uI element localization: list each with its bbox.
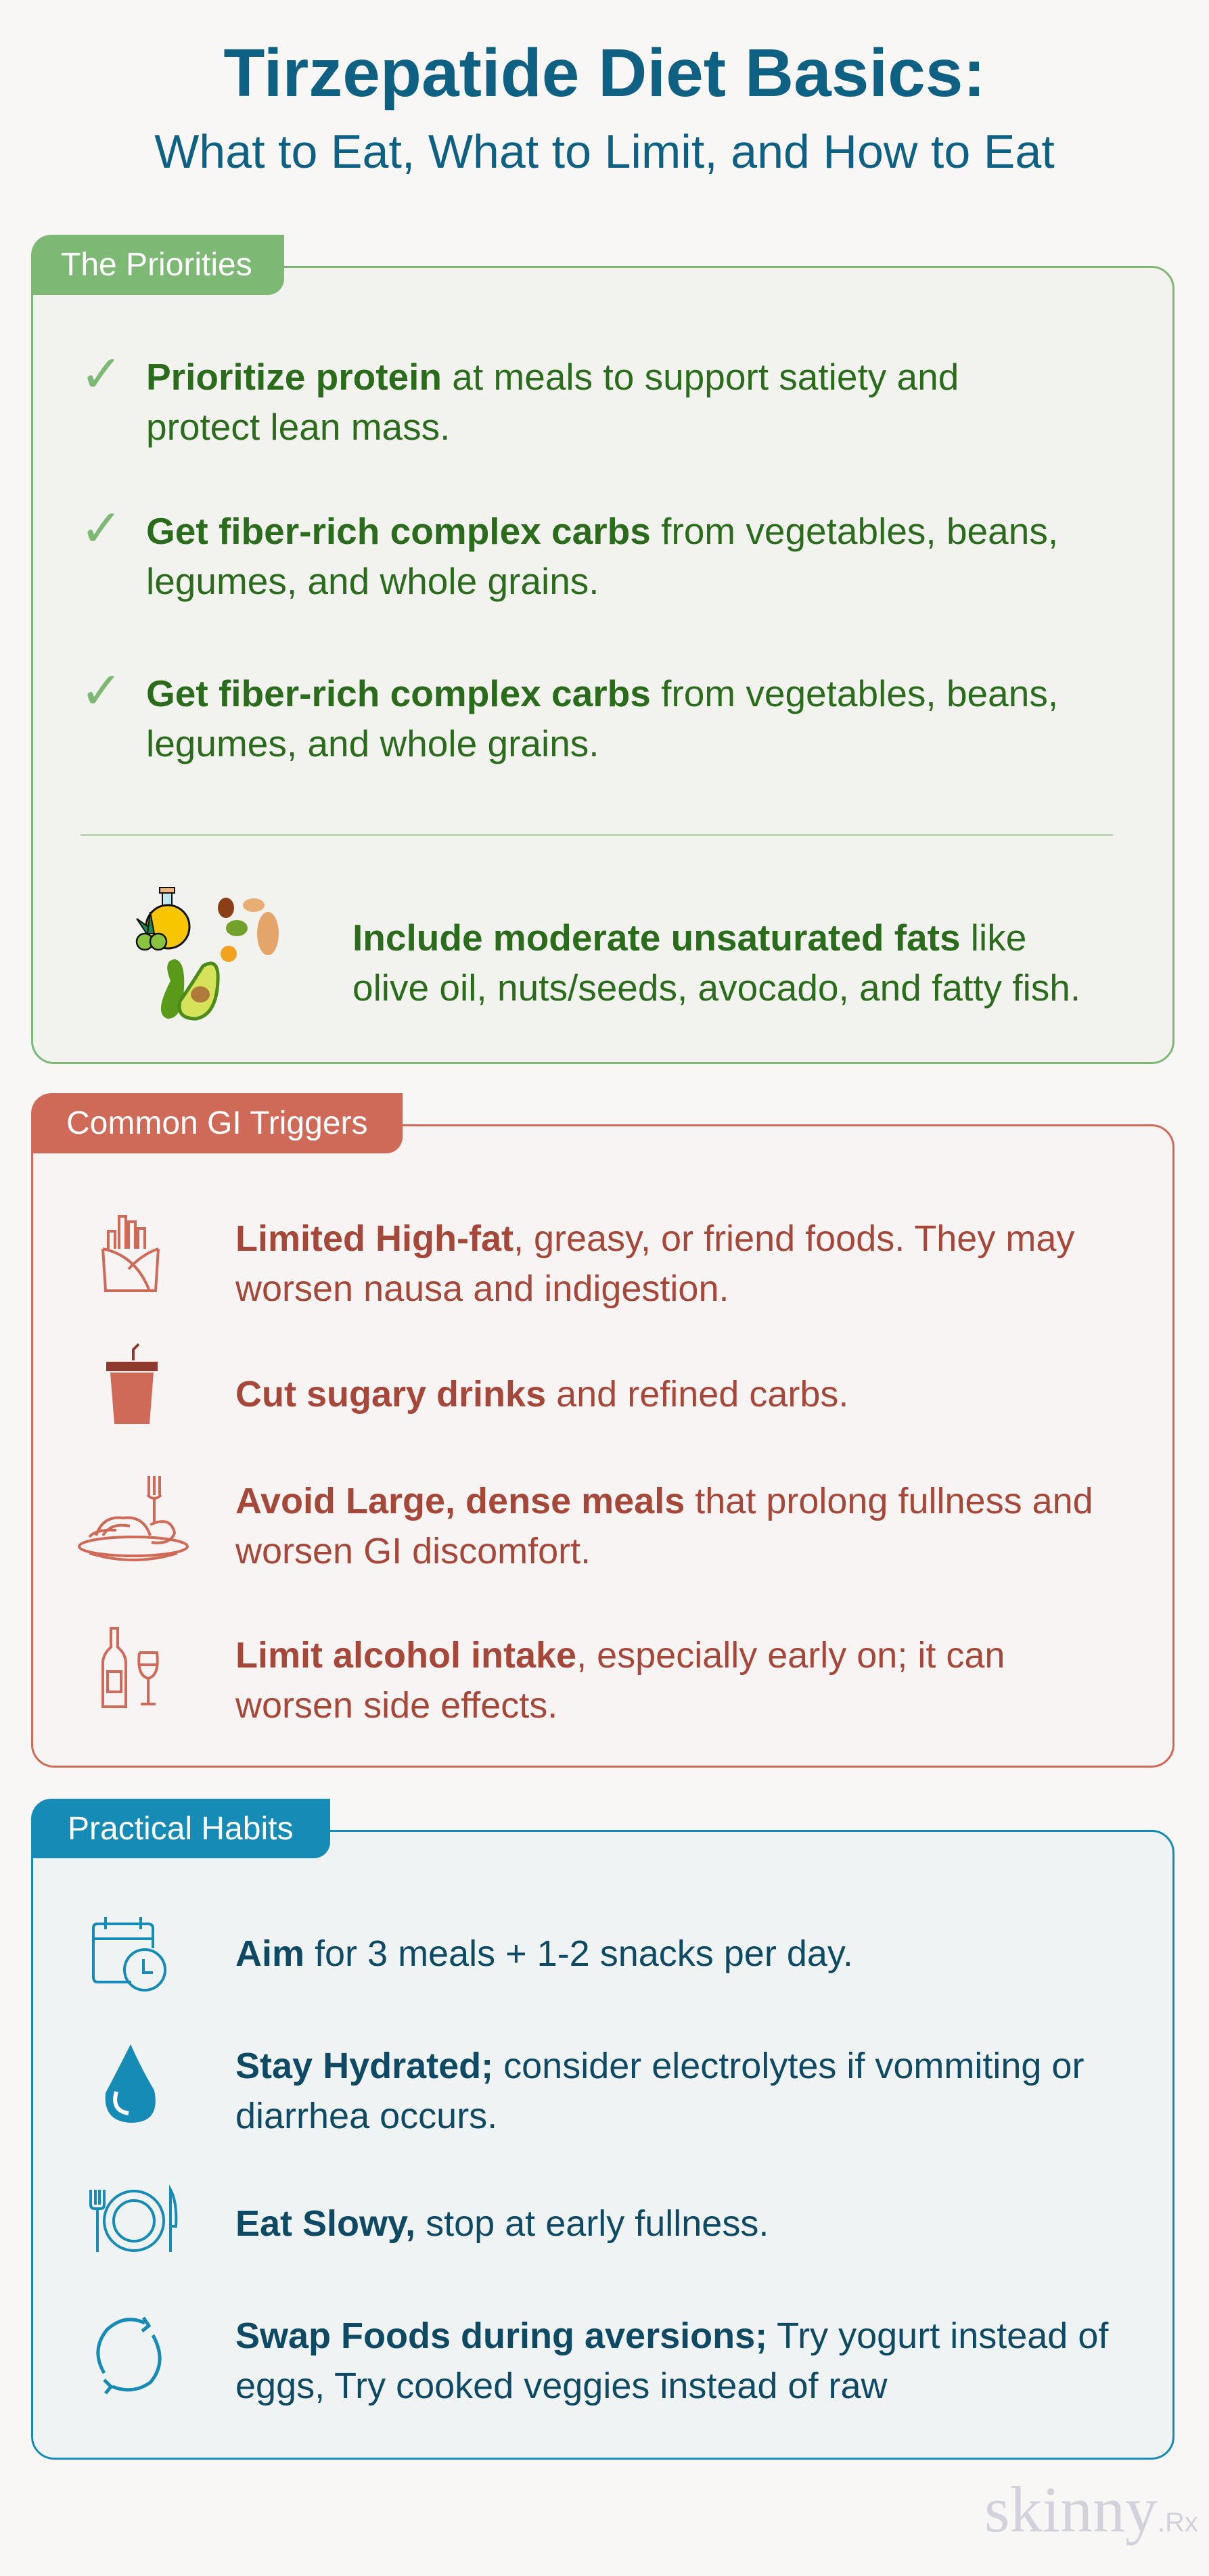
text: dense meals: Avoid Large, dense meals that prolong fullness and [235,1481,1093,1521]
text: dense meals: worsen GI discomfort. [235,1531,591,1571]
text: hydrated: Stay Hydrated; consider electrolytes if vommiting or [235,2046,1084,2086]
title: Tirzepatide Diet Basics: [223,35,986,111]
text: alcohol: worsen side effects. [235,1685,557,1726]
panel: common gi triggers [31,1124,1174,1768]
text: fiber carbs repeat [146,672,1058,764]
text: fiber carbs: Get fiber-rich complex carbs from vegetables, beans, [146,510,1058,552]
icon: check 1: ✓ [80,346,123,403]
text: fats: olive oil, nuts/seeds, avocado, and fatty fish. [352,967,1080,1009]
icon: healthy fats [135,887,279,1020]
text: sugary drinks: Cut sugary drinks and refined carbs. [235,1374,848,1414]
icon: sugary drink [106,1343,158,1424]
text: high-fat: worsen nausa and indigestion. [235,1268,729,1309]
tab: practical habits: Practical Habits [68,1810,293,1847]
text: high-fat [235,1218,1074,1309]
tab: the priorities: The Priorities [61,247,252,283]
text: hydrated: diarrhea occurs. [235,2096,497,2136]
text: dense meals [235,1481,1093,1571]
text: hydrated [235,2046,1084,2136]
logo: skinny rx: skinny.Rx [984,2473,1198,2546]
text: swap foods [235,2316,1108,2406]
subtitle: What to Eat, What to Limit, and How to Eat [154,125,1055,178]
text: fiber carbs repeat: Get fiber-rich complex carbs from vegetables, beans, [146,672,1058,714]
text: fats [352,917,1080,1009]
text: swap foods: Swap Foods during aversions; Try yogurt instead of [235,2316,1108,2356]
text: aim meals: Aim for 3 meals + 1-2 snacks per day. [235,1933,853,1974]
icon: fries [101,1215,160,1292]
text: protein: Prioritize protein at meals to support satiety and [146,356,959,398]
text: fiber carbs: legumes, and whole grains. [146,560,599,602]
icon: water drop [106,2044,156,2123]
icon: check 3: ✓ [80,662,123,720]
text: alcohol: Limit alcohol intake, especially early on; it can [235,1635,1005,1676]
icon: alcohol [101,1627,159,1708]
text: protein [146,356,959,448]
tab: common gi triggers: Common GI Triggers [66,1105,367,1141]
tab: practical habits [31,1799,330,1858]
icon: calendar clock [92,1917,166,1992]
icon: plate [89,2184,177,2252]
tab: the priorities [31,235,284,295]
text: fiber carbs [146,510,1058,602]
text: swap foods: eggs, Try cooked veggies instead of raw [235,2366,888,2406]
text: alcohol [235,1635,1005,1726]
text: protein: protect lean mass. [146,406,450,448]
panel: practical habits [31,1830,1174,2460]
text: fiber carbs repeat: legumes, and whole grains. [146,722,599,764]
text: high-fat: Limited High-fat, greasy, or friend foods. They may [235,1218,1074,1259]
text: eat slowly: Eat Slowy, stop at early fullness. [235,2203,769,2244]
icon: check 2: ✓ [80,500,123,557]
icon: large meal [78,1476,189,1561]
tab: common gi triggers [31,1093,403,1153]
panel: the priorities [31,266,1174,1064]
text: fats: Include moderate unsaturated fats like [352,917,1026,959]
icon: swap arrows [96,2316,162,2395]
